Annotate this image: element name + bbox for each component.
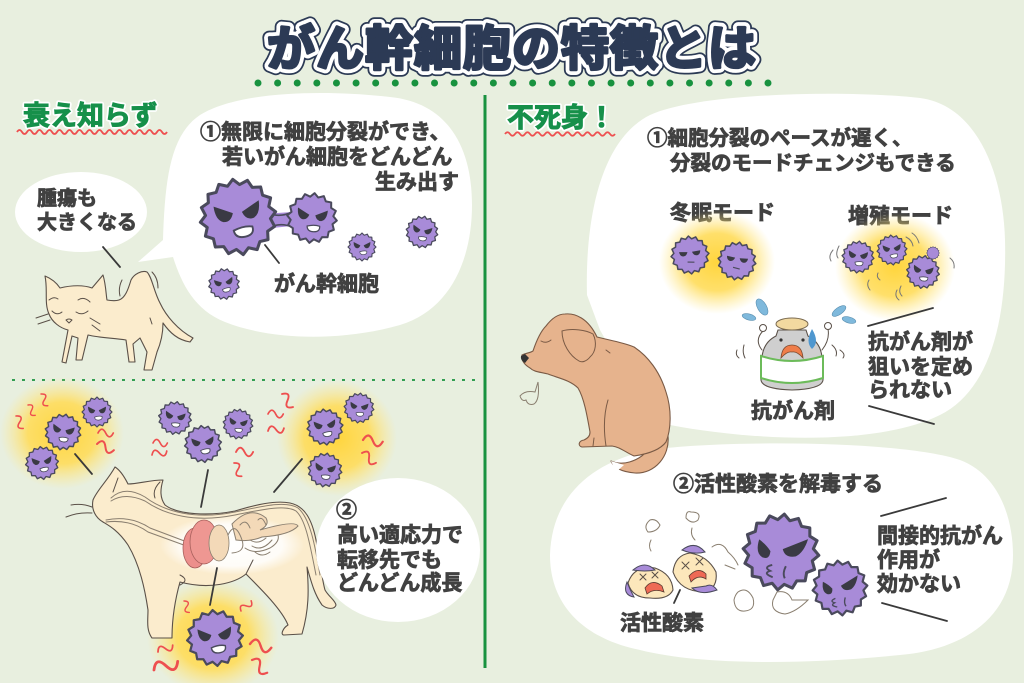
metastasis cells: centre <box>151 399 255 478</box>
dormant mode: 冬眠モード <box>670 202 775 225</box>
horizontal dotted divider <box>12 379 478 381</box>
proliferation mode: 増殖モード <box>848 205 953 228</box>
speech bubble: high adaptability <box>316 478 480 622</box>
speech bubble: high adaptability: 転移先でも <box>337 549 442 572</box>
metastasis glow: bottom <box>147 579 279 683</box>
callout: no indirect effect: 効かない <box>877 573 961 596</box>
icon: dog sigh puff <box>520 382 538 404</box>
leader lines to cat <box>75 454 302 605</box>
metastasis glow: top left <box>0 377 124 489</box>
speech bubble: high adaptability: どんどん成長 <box>337 571 462 595</box>
proliferation mode <box>830 205 955 321</box>
icon: sad dog <box>521 314 670 473</box>
heading: left: 衰え知らず <box>23 101 157 131</box>
metastasis cell: bottom <box>152 598 272 677</box>
speech bubble: detoxify: ②活性酸素を解毒する <box>673 473 883 496</box>
speech bubble: unlimited division <box>138 93 472 337</box>
speech bubble: slow division: ①細胞分裂のペースが遅く、 <box>647 126 912 150</box>
dormant mode <box>659 202 775 314</box>
metastasis glow: top right <box>277 380 397 496</box>
callout: no indirect effect: 間接的抗がん <box>877 524 1003 548</box>
title: がん幹細胞の特徴とは <box>267 23 757 76</box>
speech bubble: slow division <box>587 94 1005 438</box>
label: cancer stem cell: がん幹細胞 <box>274 272 379 296</box>
title: がん幹細胞の特徴とは <box>267 23 757 76</box>
big cat with internal organs <box>66 467 336 638</box>
title: がん幹細胞の特徴とは <box>267 23 757 76</box>
speech bubble: high adaptability: 高い適応力で <box>337 524 463 547</box>
speech bubble: tumor grows: 腫瘍も <box>37 187 97 210</box>
label: reactive oxygen: 活性酸素 <box>620 612 704 635</box>
callout: no indirect effect <box>877 498 1003 621</box>
speech bubble: detoxify <box>550 443 1013 662</box>
speech bubble: slow division: 分裂のモードチェンジもできる <box>670 152 956 175</box>
callout: cannot target <box>868 308 973 424</box>
icon: weak cat with tumor <box>36 271 193 370</box>
icon: anticancer drug bottle <box>736 297 857 390</box>
label: anticancer drug: 抗がん剤 <box>751 399 835 423</box>
speech bubble: unlimited division: 若いがん細胞をどんどん <box>222 145 452 169</box>
callout: cannot target: 抗がん剤が <box>868 330 973 354</box>
cells blowing breath <box>734 511 870 618</box>
callout: cannot target: られない <box>868 379 952 402</box>
metastasis cells: top right <box>267 391 383 489</box>
heading: right: 不死身！ <box>507 103 615 133</box>
title dotted rule <box>258 80 768 86</box>
vertical divider <box>484 95 486 668</box>
metastasis cells: top left <box>13 392 115 481</box>
heading: left: 衰え知らず <box>23 101 157 131</box>
speech bubble: high adaptability: ② <box>336 499 357 522</box>
callout: cannot target: 狙いを定め <box>868 356 973 379</box>
speech bubble: tumor grows <box>15 172 147 267</box>
speech bubble: unlimited division: 生み出す <box>375 171 459 194</box>
icon: detoxified reactive oxygen <box>626 512 738 603</box>
speech bubble: unlimited division: ①無限に細胞分裂ができ、 <box>200 120 451 144</box>
callout: no indirect effect: 作用が <box>877 548 940 572</box>
heading: right: 不死身！ <box>507 103 615 133</box>
speech bubble: tumor grows: 大きくなる <box>37 211 137 234</box>
cancer stem cells dividing <box>195 174 441 302</box>
